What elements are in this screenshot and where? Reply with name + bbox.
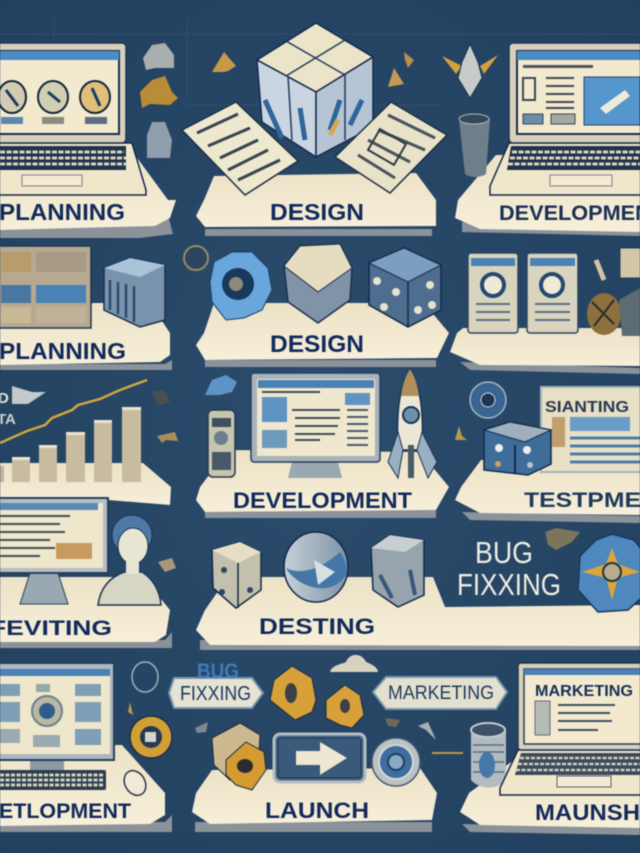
remote: [208, 410, 235, 477]
ribbon: row 2: [0, 303, 640, 374]
label: bug fixxing: BUG: [197, 660, 239, 683]
icon: doodle: [545, 528, 580, 550]
ribbon: row 4: [0, 577, 640, 650]
globe: [284, 532, 348, 602]
row 3 panel: [0, 369, 640, 523]
document: right: [335, 102, 447, 193]
cylinder: [459, 114, 490, 177]
icons: planning doodles: [140, 43, 236, 158]
keyboard: [0, 770, 106, 790]
gem: [284, 244, 352, 323]
icons: gold shards and star: [388, 44, 498, 98]
cylinder stack: [471, 723, 506, 788]
monitor: development: [251, 373, 380, 478]
label: planning: PLANNING: [0, 199, 125, 225]
dashboard: planning: [0, 246, 91, 328]
icons: pinecone cluster: [587, 248, 640, 336]
icon: outline circle: [132, 662, 158, 692]
document: left: [182, 102, 298, 195]
laptop: marketing: [500, 663, 640, 795]
icon: blue gear: [210, 252, 272, 320]
ribbon: row 1: [0, 155, 640, 238]
icons: doodles: [152, 375, 467, 443]
concentric circle: [372, 738, 420, 786]
label: design: DESIGN: [270, 199, 364, 225]
cube: blue: [104, 258, 165, 327]
laptop: planning: [0, 43, 146, 195]
label: design: DESIGN: [270, 331, 364, 358]
icon: circle badge: [470, 382, 506, 418]
die: blue: [484, 422, 551, 475]
text: screen heading: SIANTING: [545, 399, 629, 416]
label: etlopment: ETLOPMENT: [0, 800, 131, 823]
bar chart: [0, 380, 147, 482]
card: right: [527, 253, 578, 333]
label: launch: LAUNCH: [265, 798, 369, 823]
launch arrow button: [274, 734, 365, 782]
row 1 panel: [0, 23, 640, 238]
label: marketing: MARKETING: [388, 683, 494, 704]
label: marketing: [373, 677, 507, 709]
text: screen marketing: MARKETING: [535, 683, 633, 700]
icon: key circle: [184, 246, 208, 270]
label: desting: DESTING: [259, 614, 375, 639]
icon: gold badge small: [326, 685, 364, 728]
icons: doodles: [128, 702, 463, 753]
box: stone: [371, 535, 424, 607]
rocket: [388, 369, 437, 478]
row 4 panel: [0, 498, 640, 650]
icon: smudge: [158, 558, 176, 572]
icon: gold badge large: [270, 666, 316, 720]
box with gold badge: [212, 723, 266, 790]
ribbon: row 3: [0, 450, 640, 523]
label: bug fixxing: [169, 660, 263, 708]
label: development: DEVELOPMENT: [233, 488, 413, 513]
mouse: [120, 767, 150, 799]
card: left: [468, 253, 518, 333]
ribbon: row 5: [0, 745, 640, 835]
die: [369, 248, 441, 327]
icon: gold coin: [130, 716, 172, 758]
screen: testing: [541, 387, 640, 472]
die: tan: [212, 542, 261, 608]
icon: cloud: [330, 655, 378, 672]
knife shape: [12, 386, 46, 404]
row 2 panel: [0, 244, 640, 374]
shield: [578, 534, 640, 612]
label: maunsh: MAUNSH: [535, 800, 640, 825]
label: bug fixxing: FIXXING: [180, 683, 251, 705]
label: planning: PLANNING: [0, 338, 126, 364]
text: bug: BUG: [475, 535, 533, 570]
monitor: reviewing: [0, 498, 108, 604]
monitor: overview: [0, 663, 114, 770]
person: [98, 515, 161, 605]
text: fixxing: FIXXING: [457, 567, 561, 602]
laptop: development: [490, 43, 640, 195]
cube: design: [257, 23, 373, 157]
row 5 panel: [0, 655, 640, 835]
